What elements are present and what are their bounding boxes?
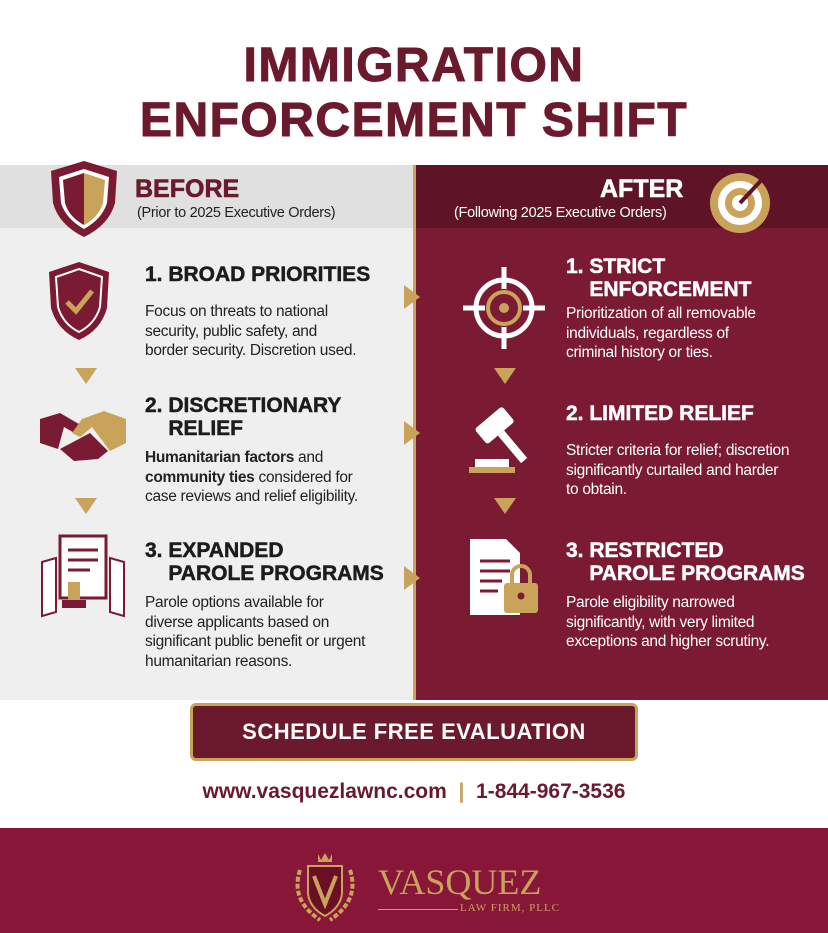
- after heading: AFTER: [600, 175, 683, 203]
- icon: gavel: [469, 407, 528, 473]
- contact line: www.vasquezlawnc.com | 1-844-967-3536: [202, 780, 625, 803]
- item 3 before: PAROLE PROGRAMS: [168, 562, 384, 585]
- item 2 before: Humanitarian factors and community ties considered for case reviews and relief eligibility.: [145, 449, 358, 505]
- item 2 after: 2. LIMITED RELIEF: [566, 402, 754, 425]
- icon: target header: [710, 173, 770, 233]
- footer: [0, 828, 828, 933]
- item 1 before: Focus on threats to national security, public safety, and border security. Discretion used.: [145, 303, 356, 359]
- title: [140, 39, 688, 147]
- item 3 after: [566, 539, 805, 650]
- logo emblem: [296, 853, 354, 922]
- title: IMMIGRATION: [244, 39, 584, 92]
- item 2 after: [566, 402, 789, 498]
- footer: LAW FIRM, PLLC: [460, 902, 560, 914]
- arrows between columns: [404, 285, 420, 309]
- item 3 before: [145, 539, 384, 670]
- icon: shield check: [49, 262, 109, 340]
- icon: document lock: [470, 539, 538, 615]
- item 3 before: Parole options available for diverse applicants based on significant public benefit or urgent humanitarian reasons.: [145, 594, 365, 670]
- CTA button: [190, 703, 638, 761]
- item 1 after: 1. STRICT: [566, 255, 665, 278]
- item 2 before: RELIEF: [168, 417, 243, 440]
- icon: shield header: [51, 161, 117, 237]
- item 3 before: 3. EXPANDED: [145, 539, 283, 562]
- item 3 after: Parole eligibility narrowed significantly, with very limited exceptions and higher scrutiny.: [566, 594, 769, 650]
- item 2 before: [145, 394, 358, 505]
- item 2 before: 2. DISCRETIONARY: [145, 394, 341, 417]
- icon: document stamp: [41, 534, 125, 618]
- item 3 after: 3. RESTRICTED: [566, 539, 724, 562]
- icon: handshake: [40, 411, 126, 461]
- CTA button: SCHEDULE FREE EVALUATION: [242, 719, 586, 744]
- item 2 after: Stricter criteria for relief; discretion significantly curtailed and harder to obtain.: [566, 442, 789, 498]
- logo text: VASQUEZ: [378, 862, 541, 902]
- item 1 before: [145, 263, 370, 359]
- panel: after: [413, 165, 828, 700]
- item 1 before: 1. BROAD PRIORITIES: [145, 263, 370, 286]
- icon: crosshair: [463, 267, 545, 349]
- title: ENFORCEMENT SHIFT: [140, 94, 688, 147]
- after subheading: (Following 2025 Executive Orders): [454, 205, 667, 221]
- item 1 after: [566, 255, 756, 361]
- item 3 after: PAROLE PROGRAMS: [589, 562, 805, 585]
- before header band: [0, 165, 413, 228]
- panel: before: [0, 165, 413, 700]
- item 1 after: ENFORCEMENT: [589, 278, 752, 301]
- item 1 after: Prioritization of all removable individuals, regardless of criminal history or ties.: [566, 305, 756, 361]
- before subheading: (Prior to 2025 Executive Orders): [137, 205, 335, 221]
- before heading: BEFORE: [135, 175, 239, 203]
